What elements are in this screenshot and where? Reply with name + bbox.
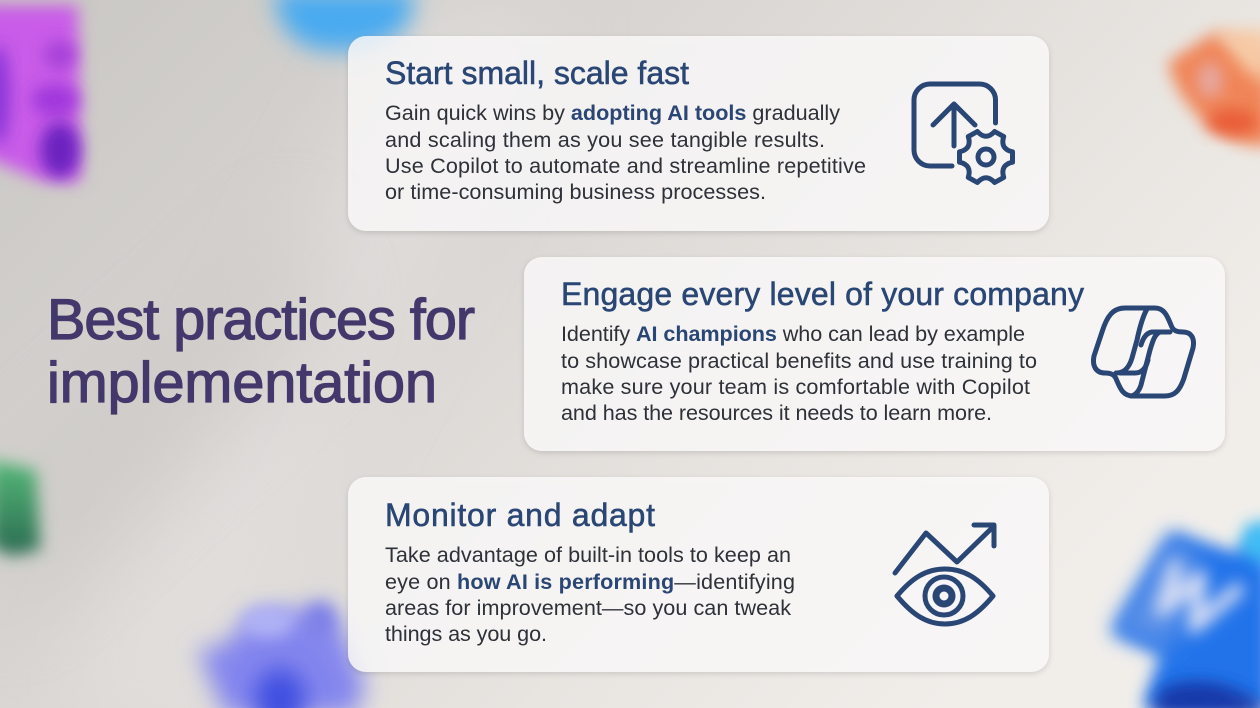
body text: start small: Gain quick wins by adopting AI tools gradually — [385, 100, 840, 125]
body text: engage: and has the resources it needs to learn more. — [561, 400, 992, 425]
blurred app icon: word — [1112, 520, 1260, 708]
heading: monitor: Monitor and adapt — [385, 497, 655, 533]
blurred app icon: violet — [198, 600, 365, 708]
body text: monitor: areas for improvement—so you can tweak — [385, 595, 791, 620]
icon: upload with gear — [914, 84, 1012, 182]
title: Best practices for — [47, 288, 475, 352]
heading: start small: Start small, scale fast — [385, 55, 689, 91]
title — [47, 288, 475, 415]
body text: start small: or time-consuming business processes. — [385, 179, 766, 204]
body text: monitor: things as you go. — [385, 621, 547, 646]
icon: copilot — [1093, 308, 1194, 396]
blurred app icon: purple — [0, 5, 80, 182]
heading: engage: Engage every level of your company — [561, 276, 1084, 312]
icon: eye with trend arrow — [895, 525, 994, 624]
body text: engage — [561, 321, 1037, 425]
panel: monitor — [348, 477, 1049, 672]
body text: monitor: Take advantage of built-in tools to keep an — [385, 542, 791, 567]
blurred app icon: blue top — [275, 0, 415, 51]
body text: monitor: eye on how AI is performing—identifying — [385, 569, 795, 594]
title: implementation — [47, 351, 437, 415]
blurred app icon: orange — [1168, 30, 1260, 148]
body text: start small: Use Copilot to automate and streamline repetitive — [385, 153, 866, 178]
body text: engage: Identify AI champions who can lead by example — [561, 321, 1025, 346]
panel: engage — [524, 257, 1225, 451]
body text: start small — [385, 100, 866, 204]
body text: monitor — [385, 542, 795, 646]
body text: start small: and scaling them as you see tangible results. — [385, 127, 825, 152]
body text: engage: to showcase practical benefits and use training to — [561, 348, 1037, 373]
body text: engage: make sure your team is comfortable with Copilot — [561, 374, 1030, 399]
panel: start small — [348, 36, 1049, 231]
blurred app icon: green — [0, 460, 40, 556]
